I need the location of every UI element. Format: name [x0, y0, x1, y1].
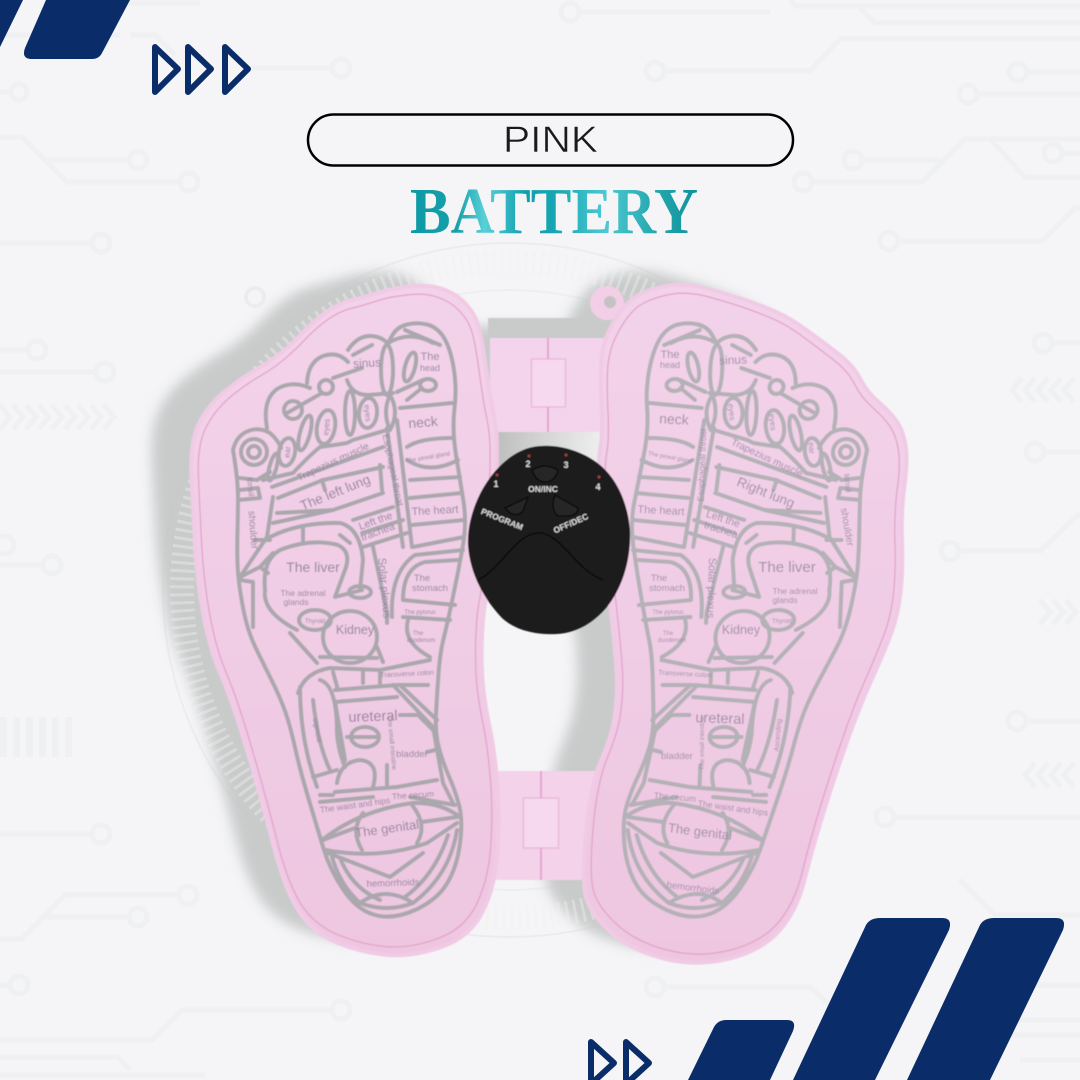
right foot labels: The liver — [758, 559, 816, 576]
left foot labels: glands — [283, 597, 309, 607]
right foot labels: Esophageal throat — [696, 428, 708, 502]
controller labels: 1 — [493, 479, 499, 489]
controller — [468, 446, 630, 634]
controller body — [468, 446, 630, 634]
left foot labels: ear — [283, 446, 293, 458]
left foot labels: Kidney — [336, 623, 375, 637]
right foot labels: Ascending — [774, 718, 783, 752]
right foot labels: The — [651, 573, 667, 584]
controller labels: 2 — [525, 459, 531, 469]
right foot labels: stomach — [649, 583, 685, 594]
left foot labels: duodenum — [407, 638, 435, 644]
right foot labels: The cecum — [654, 790, 696, 804]
right foot labels: Thyroid — [772, 619, 792, 625]
left foot labels: hemorrhoids — [366, 877, 420, 890]
left foot labels: head — [420, 363, 440, 373]
left foot labels: neck — [408, 413, 439, 431]
left foot labels: tonsil — [245, 477, 256, 497]
right foot pad — [584, 285, 907, 963]
left foot labels: The adrenal — [280, 588, 326, 598]
left foot labels: Thyroid — [305, 619, 325, 625]
right foot labels: Right lung — [735, 474, 797, 511]
left foot labels: Trapezius muscle — [296, 441, 371, 484]
right foot labels: neck — [659, 410, 690, 428]
right foot labels: ear — [807, 442, 817, 455]
right foot labels: sinus — [719, 352, 747, 368]
right foot labels: ureteral — [695, 710, 745, 728]
heading: BATTERY: BATTERY — [410, 175, 698, 248]
controller buttons — [505, 466, 578, 516]
right foot labels: The waist and hips — [697, 798, 769, 818]
left foot labels: stomach — [412, 583, 448, 594]
controller labels: PROGRAM — [480, 506, 525, 532]
right foot labels: eyes — [767, 413, 778, 431]
right foot labels: eyes — [726, 403, 737, 421]
bottom-right navy bars — [688, 918, 1064, 1080]
right foot labels: Solar plexus — [704, 558, 718, 619]
hanging loop — [590, 286, 624, 320]
right foot labels: The heart — [637, 504, 685, 518]
right foot labels: The pylorus — [652, 610, 684, 616]
left foot labels: trachea — [359, 521, 397, 544]
right foot labels: hemorrhoids — [666, 880, 720, 897]
left foot labels: The pylorus — [404, 610, 436, 616]
left foot labels: Transverse colon — [380, 670, 434, 679]
right foot labels: Left the — [704, 508, 742, 530]
left foot labels: The — [414, 573, 430, 584]
right foot labels: The small intestine — [699, 716, 706, 770]
left foot labels: ureteral — [348, 708, 398, 726]
bottom arrows icon — [591, 1042, 649, 1080]
controller labels: 4 — [595, 482, 601, 492]
right foot labels: duodenum — [658, 638, 686, 644]
right foot labels: Trapezius muscle — [729, 437, 805, 480]
right foot labels: The pineal gland — [647, 451, 692, 465]
right foot labels: The — [661, 349, 679, 361]
left foot labels: The waist and hips — [319, 795, 391, 815]
right foot labels: shoulder — [838, 507, 855, 548]
left foot labels — [245, 351, 459, 890]
pill label: PINK — [308, 114, 793, 166]
right foot labels: trachea — [702, 519, 740, 541]
right foot labels: head — [660, 360, 680, 370]
controller labels: ON/INC — [528, 484, 558, 494]
left foot labels: sigmoid — [311, 718, 322, 743]
right foot labels: Kidney — [722, 623, 761, 637]
right foot labels: glands — [772, 595, 798, 605]
left foot labels: The pineal gland — [406, 451, 451, 465]
left foot labels: The small intestine — [386, 716, 397, 771]
left foot labels: bladder — [396, 749, 428, 760]
controller seam — [478, 533, 603, 580]
right foot labels: tonsil — [842, 473, 853, 493]
bottom hinge — [488, 771, 596, 880]
product: foot massager — [191, 285, 907, 963]
right foot labels — [637, 349, 855, 897]
left foot labels: The liver — [286, 559, 340, 575]
pill label: PINK: PINK — [503, 119, 598, 160]
left foot labels: The left lung — [298, 472, 372, 513]
product shadow — [151, 271, 867, 949]
left foot labels: The — [421, 351, 439, 363]
controller labels: 3 — [563, 460, 569, 470]
right foot labels: The — [663, 631, 674, 637]
left foot labels: The — [413, 631, 424, 637]
controller labels — [480, 459, 601, 535]
left foot pad — [191, 286, 499, 955]
left foot labels: shoulder — [245, 510, 260, 550]
right foot labels: The adrenal — [772, 586, 818, 596]
left foot labels: The cecum — [392, 789, 434, 801]
controller labels: OFF/DEC — [552, 511, 590, 535]
left foot labels: Esophageal throat — [381, 433, 406, 507]
top-left navy bars — [0, 0, 130, 59]
left foot labels: sinus — [353, 355, 381, 371]
right foot labels: Transverse colon — [658, 670, 712, 679]
left foot labels: Solar plexus — [375, 557, 393, 619]
left foot labels: The genital — [354, 817, 420, 840]
right foot labels: bladder — [661, 751, 693, 762]
left foot labels: eyes — [321, 418, 332, 436]
top-left arrows icon — [155, 47, 248, 92]
left foot labels: The heart — [411, 504, 459, 518]
controller LEDs — [496, 454, 600, 478]
left foot labels: eyes — [362, 404, 373, 422]
gaps between hinges — [488, 318, 610, 468]
right foot labels: The genital — [667, 820, 733, 843]
top hinge — [490, 338, 610, 432]
gauge tick ring — [182, 262, 838, 918]
radial gauge behind product — [163, 243, 857, 937]
left foot reflexology diagram — [233, 323, 465, 917]
left foot labels: Left the — [357, 510, 394, 533]
right foot reflexology diagram — [616, 323, 872, 917]
